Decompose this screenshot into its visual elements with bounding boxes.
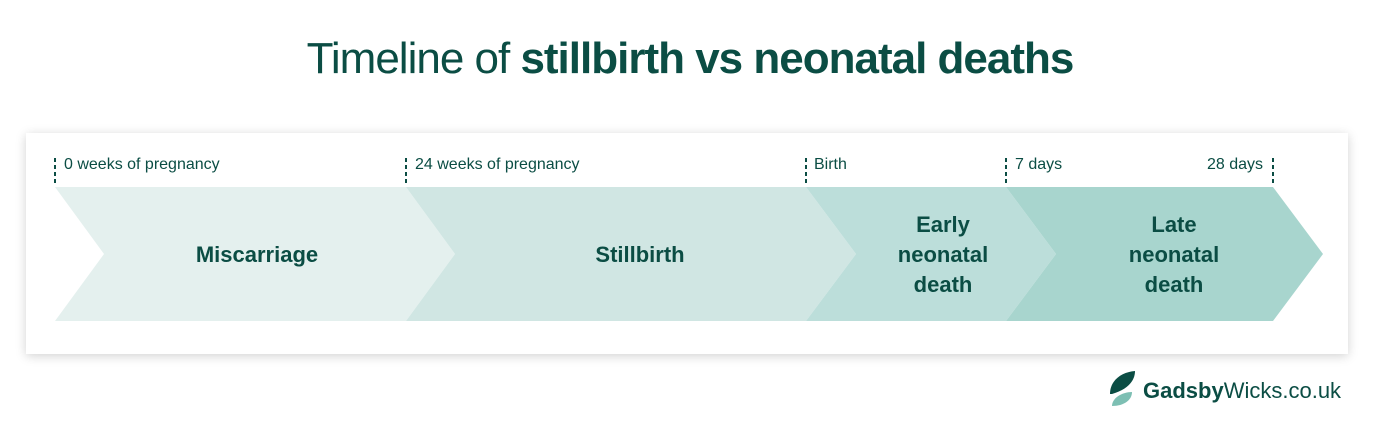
chevron: late neonatal death: death [1145,272,1203,297]
label: 28 days: 28 days [1207,156,1263,173]
label: 0 weeks: 0 weeks of pregnancy [64,156,220,173]
icon: leaf [1110,371,1135,406]
chevron: late neonatal death [1006,187,1323,321]
title: Timeline of stillbirth vs neonatal deaths [307,34,1073,83]
chevron: stillbirth: Stillbirth [595,242,685,267]
chevron: miscarriage [55,187,455,321]
chevron: early neonatal death: neonatal [898,242,988,267]
chevron: early neonatal death [806,187,1056,321]
label: 24 weeks: 24 weeks of pregnancy [415,156,580,173]
chevron: late neonatal death: Late [1151,212,1197,237]
label: birth: Birth [814,156,847,173]
chevron: stillbirth [406,187,856,321]
chevron: early neonatal death: death [914,272,972,297]
panel: timeline card [26,133,1348,354]
chevron: early neonatal death: Early [916,212,971,237]
chevron: late neonatal death: neonatal [1129,242,1219,267]
chevron: miscarriage: Miscarriage [196,242,318,267]
logo [1110,371,1341,406]
logo text: GadsbyWicks.co.uk [1143,378,1341,403]
label: 7 days: 7 days [1015,156,1062,173]
